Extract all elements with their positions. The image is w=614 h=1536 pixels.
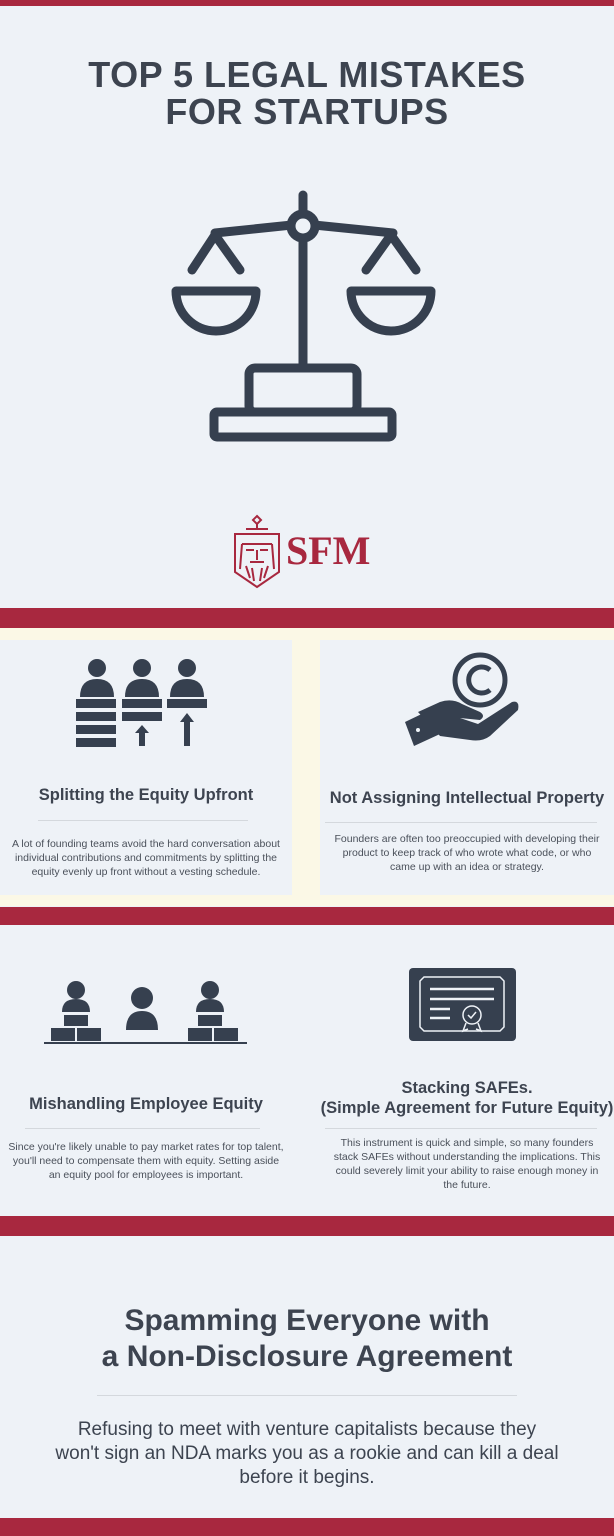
text: equity evenly up front without a vesting schedule.	[32, 866, 260, 878]
text: product to keep track of who wrote what code, or who	[343, 847, 591, 859]
heading: Mishandling Employee Equity	[29, 1095, 263, 1113]
text: you'll need to compensate them with equity. Setting aside	[13, 1155, 279, 1167]
text	[12, 838, 280, 878]
heading: (Simple Agreement for Future Equity)	[321, 1099, 613, 1117]
text: won't sign an NDA marks you as a rookie and can kill a deal	[55, 1443, 559, 1464]
panel: intellectual property	[320, 640, 614, 895]
panel: splitting equity	[0, 640, 292, 895]
heading	[102, 1304, 512, 1373]
text: This instrument is quick and simple, so many founders	[341, 1137, 593, 1149]
title: FOR STARTUPS	[165, 91, 449, 132]
icon: people with equity stacks	[76, 659, 207, 747]
text: individual contributions and commitments by splitting the	[15, 852, 277, 864]
heading	[321, 1079, 613, 1117]
icon: certificate	[409, 968, 516, 1041]
heading: a Non-Disclosure Agreement	[102, 1340, 512, 1373]
heading: Splitting the Equity Upfront	[39, 786, 253, 804]
title	[88, 54, 526, 132]
icon: hand with copyright	[405, 652, 518, 746]
panel: NDA	[55, 1304, 559, 1488]
panel: stacking SAFEs	[320, 950, 614, 1203]
text	[8, 1141, 284, 1181]
text: the future.	[443, 1179, 491, 1191]
text: Founders are often too preoccupied with developing their	[334, 833, 600, 845]
logo: SFM	[234, 514, 370, 588]
text	[334, 1137, 600, 1191]
text	[334, 833, 600, 873]
panel: employee equity	[0, 950, 292, 1203]
text: Refusing to meet with venture capitalists because they	[78, 1419, 536, 1440]
text	[55, 1419, 559, 1488]
heading: Not Assigning Intellectual Property	[330, 789, 604, 807]
icon: scales of justice	[172, 190, 436, 442]
text: stack SAFEs without understanding the implications. This	[334, 1151, 600, 1163]
text: could severely limit your ability to raise enough money in	[336, 1165, 598, 1177]
logo: SFM: SFM	[286, 528, 370, 573]
text: Since you're likely unable to pay market rates for top talent,	[8, 1141, 284, 1153]
icon: employees	[44, 981, 247, 1044]
text: A lot of founding teams avoid the hard conversation about	[12, 838, 280, 850]
text: came up with an idea or strategy.	[390, 861, 544, 873]
text: an equity pool for employees is important.	[49, 1169, 243, 1181]
heading: Spamming Everyone with	[124, 1304, 490, 1337]
title: TOP 5 LEGAL MISTAKES	[88, 54, 526, 95]
text: before it begins.	[239, 1467, 375, 1488]
heading: Stacking SAFEs.	[401, 1079, 533, 1097]
